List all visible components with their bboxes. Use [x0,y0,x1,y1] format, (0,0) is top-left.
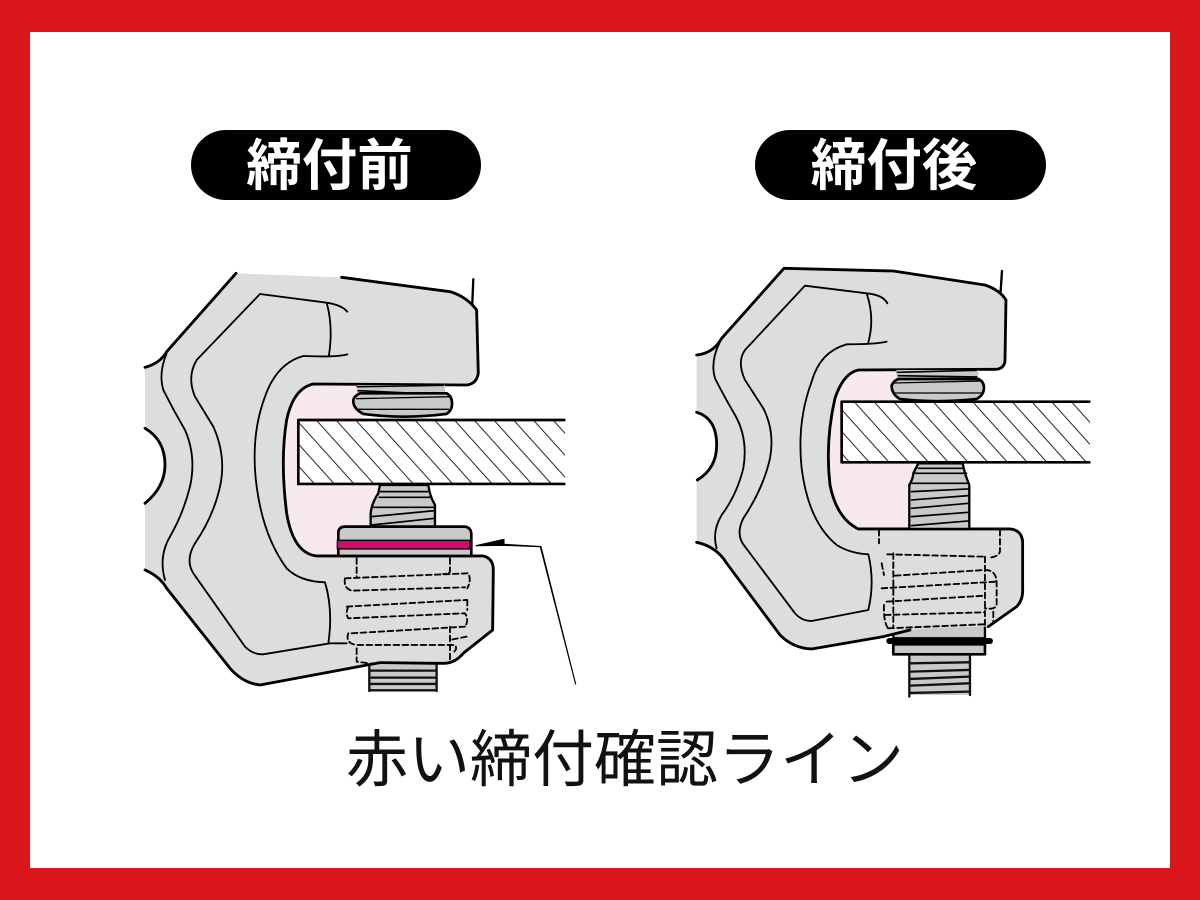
heading pill: before tightening [191,130,481,200]
inner contour lines [161,294,347,654]
caption: red tightening check line: 赤い締付確認ライン [346,726,904,795]
inner contour lines [713,286,887,621]
lower nut, washer and bolt end [889,625,990,697]
top corner tick [469,279,477,303]
pink clamp interior [828,370,913,529]
heading pill: before tightening: 締付前 [246,135,413,197]
middle bolt thread [909,463,969,529]
steel plate section with hatching [842,402,1090,462]
leader arrow to check line [476,539,576,684]
top corner tick [1001,271,1002,292]
clamp body [697,268,1023,649]
hidden thread dashed lines [345,558,470,664]
upper bolt thread and washer [892,370,984,401]
heading pill: after tightening [755,130,1046,200]
steel plate section with hatching [298,420,565,484]
nut with red tightening-check line [337,527,471,556]
clamp outline [697,268,1023,649]
heading pill: after tightening: 締付後 [811,135,977,197]
diagram: clamp after tightening [697,268,1090,697]
clamp body [145,273,493,685]
diagram: clamp before tightening [145,273,576,691]
hidden thread dashed lines [879,530,1000,629]
lower threaded bolt end [369,662,437,691]
middle bolt thread [371,485,435,527]
upper bolt thread and washer [353,385,452,417]
pink clamp interior [283,384,383,556]
clamp outline [145,273,493,685]
